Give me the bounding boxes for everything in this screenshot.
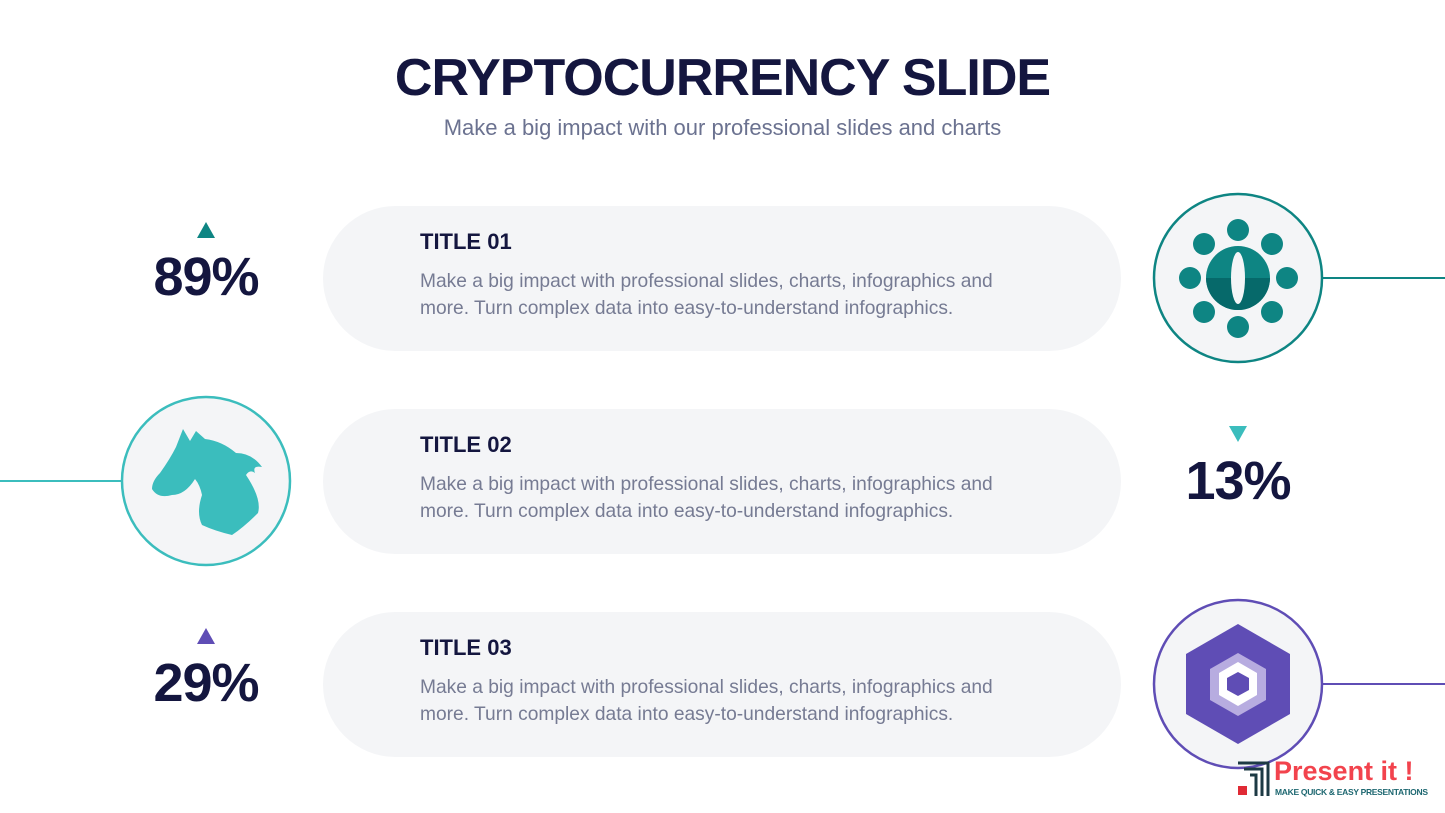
panel: title 03: more. Turn complex data into easy-to-understand infographics. [420, 704, 953, 725]
panel: title 02 [323, 409, 1121, 554]
panel: title 01: more. Turn complex data into easy-to-understand infographics. [420, 298, 953, 319]
title: CRYPTOCURRENCY SLIDE [395, 49, 1050, 107]
logo: MAKE QUICK & EASY PRESENTATIONS [1275, 787, 1428, 797]
panel: title 03: Make a big impact with professional slides, charts, infographics and [420, 677, 993, 698]
logo [1238, 756, 1428, 797]
panel: title 03: TITLE 03 [420, 635, 512, 660]
logo: Present it ! [1274, 756, 1414, 786]
stat: 29%: 29% [153, 653, 259, 713]
panel: title 02: more. Turn complex data into easy-to-understand infographics. [420, 501, 953, 522]
panel: title 01: Make a big impact with professional slides, charts, infographics and [420, 271, 993, 292]
stat: 89%: 89% [153, 247, 259, 307]
panel: title 02: Make a big impact with professional slides, charts, infographics and [420, 474, 993, 495]
stat: 13%: 13% [1185, 451, 1291, 511]
panel: title 02: TITLE 02 [420, 432, 512, 457]
icon: hexagon circle [1152, 598, 1445, 770]
panel: title 01: TITLE 01 [420, 229, 512, 254]
panel: title 01 [323, 206, 1121, 351]
subtitle: Make a big impact with our professional slides and charts [444, 115, 1001, 140]
icon: horse circle [0, 396, 292, 566]
icon: coin circle [1152, 192, 1445, 364]
panel: title 03 [323, 612, 1121, 757]
